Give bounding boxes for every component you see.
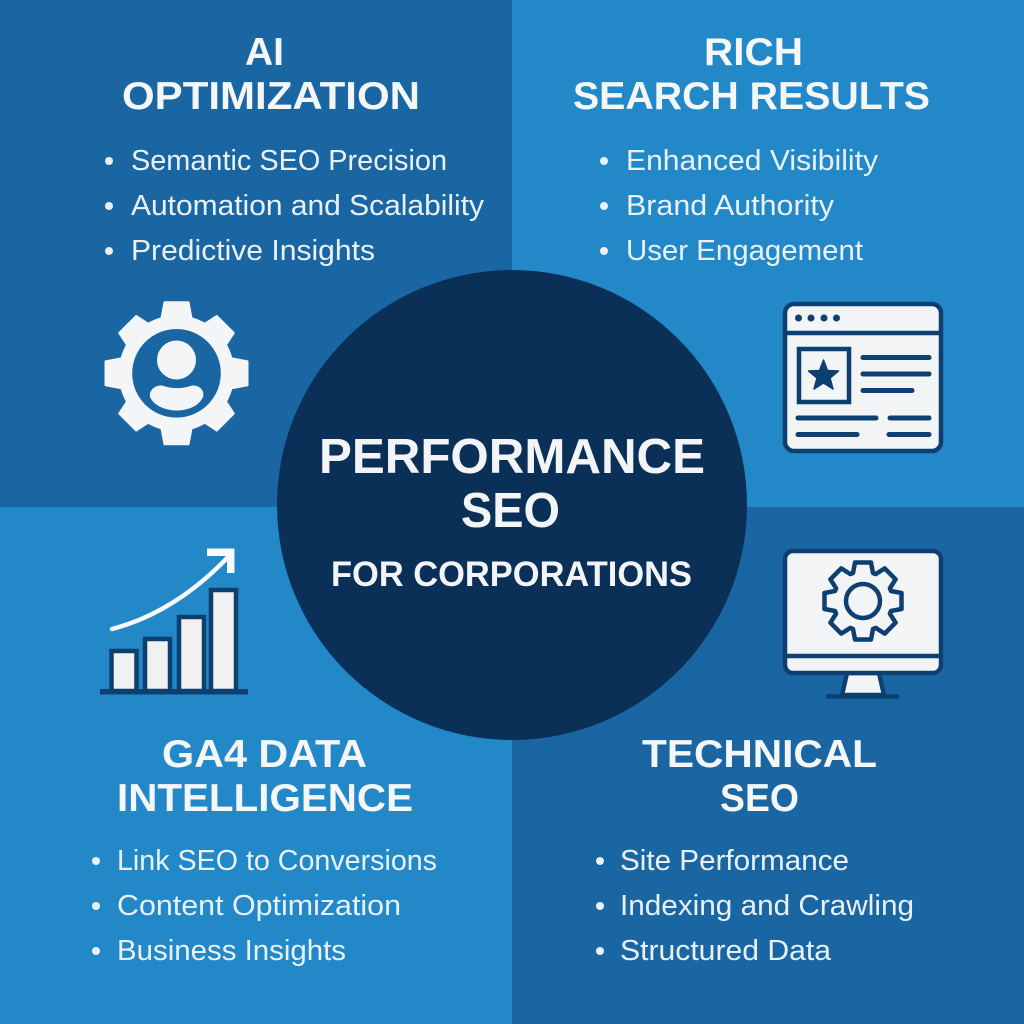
title: performance SEO — [319, 430, 705, 538]
list: AI optimization benefits: Automation and Scalability — [131, 190, 485, 222]
panel: AI optimization — [0, 0, 512, 507]
list: technical SEO benefits: Site Performance — [620, 845, 849, 877]
list: GA4 benefits: Business Insights — [117, 935, 346, 967]
list: GA4 benefits: Content Optimization — [117, 890, 401, 922]
list: GA4 benefits — [92, 845, 437, 967]
heading: rich search results: SEARCH RESULTS — [573, 75, 930, 118]
center circle: performance SEO for corporations — [277, 270, 747, 740]
list: rich search result benefits: Brand Authority — [626, 190, 835, 222]
heading: technical SEO: SEO — [720, 777, 799, 820]
list: rich search result benefits — [600, 145, 879, 267]
list: AI optimization benefits: Predictive Insights — [131, 235, 375, 267]
list: AI optimization benefits: Semantic SEO Precision — [131, 145, 447, 177]
title: performance SEO: PERFORMANCE — [319, 430, 705, 484]
icon: browser window with star — [785, 304, 941, 451]
list: technical SEO benefits: Indexing and Crawling — [620, 890, 914, 922]
list: rich search result benefits: Enhanced Visibility — [626, 145, 879, 177]
panel: technical SEO — [512, 507, 1024, 1024]
heading: AI optimization — [122, 31, 420, 118]
heading: GA4 data intelligence — [117, 733, 413, 820]
list: technical SEO benefits: Structured Data — [620, 935, 832, 967]
panel: rich search results — [512, 0, 1024, 507]
icon: rising bar chart with arrow — [100, 548, 248, 694]
heading: GA4 data intelligence: GA4 DATA — [162, 733, 367, 776]
list: rich search result benefits: User Engagement — [626, 235, 863, 267]
icon: monitor with gear — [785, 551, 941, 696]
heading: rich search results — [573, 31, 930, 118]
list: AI optimization benefits — [105, 145, 485, 267]
list: technical SEO benefits — [596, 845, 914, 967]
list: GA4 benefits: Link SEO to Conversions — [117, 845, 437, 877]
heading: AI optimization: OPTIMIZATION — [122, 75, 420, 118]
panel: GA4 data intelligence — [0, 507, 512, 1024]
heading: rich search results: RICH — [704, 31, 803, 74]
heading: technical SEO: TECHNICAL — [642, 733, 877, 776]
heading: AI optimization: AI — [245, 31, 284, 74]
icon: gear with person — [106, 302, 248, 444]
heading: GA4 data intelligence: INTELLIGENCE — [117, 777, 413, 820]
title: performance SEO: SEO — [461, 484, 560, 538]
subtitle: for corporations: FOR CORPORATIONS — [331, 555, 692, 594]
heading: technical SEO — [642, 733, 877, 820]
